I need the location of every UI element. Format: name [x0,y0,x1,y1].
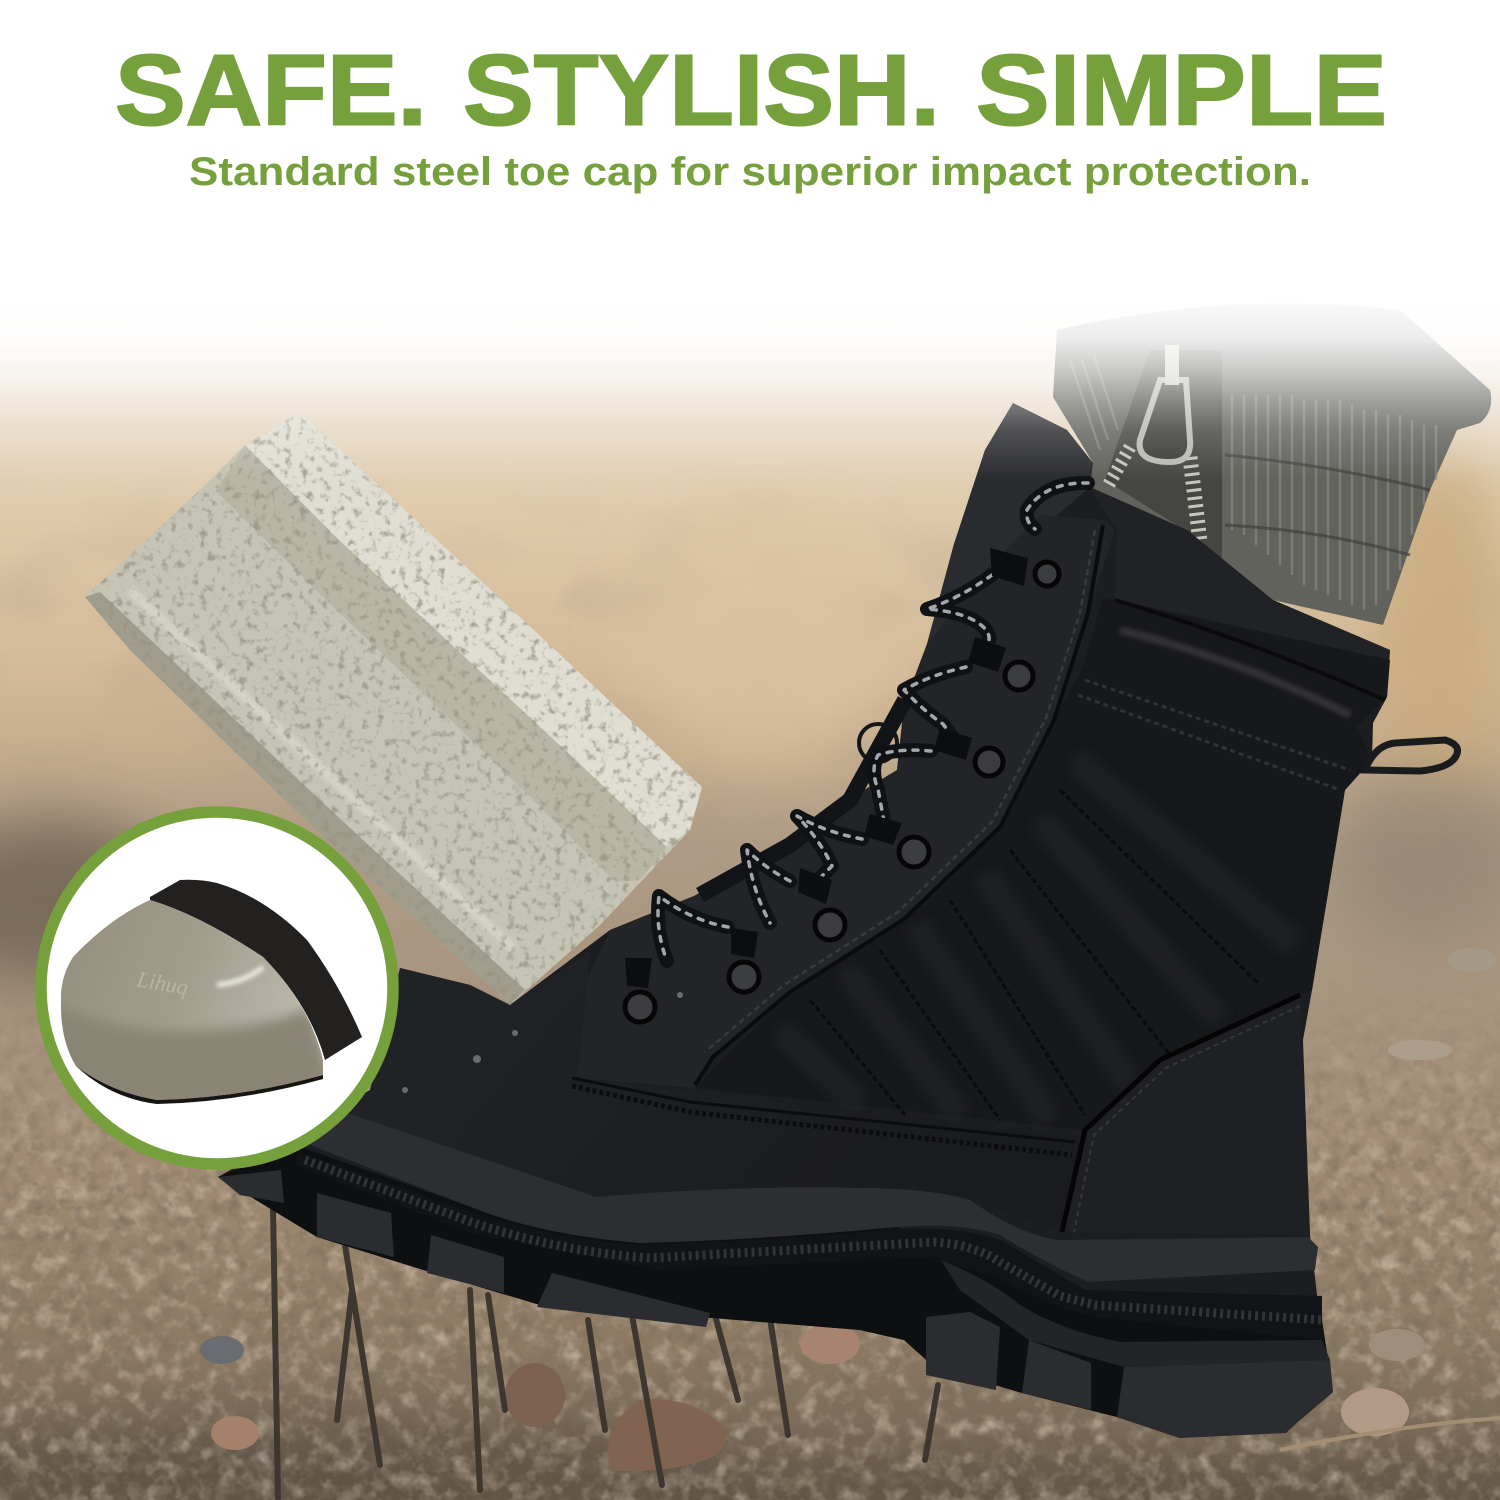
black rubber edge [150,880,362,1060]
brick pale groove [130,590,515,950]
outsole base [218,1145,1333,1438]
zipper puller [1140,380,1190,462]
pull loop [1365,740,1458,771]
nails under sole [273,1205,938,1498]
tongue [927,403,1093,644]
zipper teeth [1108,447,1130,486]
dust specks [402,992,683,1093]
mesh band [295,1152,1322,1340]
concrete brick [85,410,710,1010]
title: SIMPLE [976,34,1387,146]
title: SAFE. [115,34,427,146]
trouser ribbing [1070,355,1436,610]
tongue webbing [700,700,905,895]
quilted textile panel [695,667,1372,1130]
eyelets [625,562,1059,1022]
textile top stitching [1078,680,1350,790]
title [115,34,1387,146]
cap highlight [217,967,263,985]
ground stones [200,948,1500,1471]
midsole upper band [310,1113,1318,1282]
brick top face [245,412,702,847]
tongue ring [859,724,897,762]
boot [218,403,1458,1438]
quilting channels [780,760,1295,1120]
laces [658,483,1088,961]
white fade at top of photo [0,230,1500,480]
title: STYLISH. [463,34,940,146]
toe cap shell [60,900,323,1100]
collar padding: lower roll [1083,597,1390,727]
heel counter [1062,995,1310,1235]
toe cap front band [61,1006,323,1100]
inset: steel toe cap [41,812,393,1164]
tread lugs [218,1170,1333,1438]
cap embossed mark: Lihuq [134,966,190,1000]
boot upper silhouette [218,403,1390,1438]
collar padding: upper roll [1090,487,1390,690]
cap base outline [76,1066,323,1104]
brick silhouette [85,412,702,1005]
subtitle: Standard steel toe cap for superior impact protection. [189,150,1311,194]
heel rim [941,1260,1330,1367]
brick lower edge [85,592,525,1005]
toe box [300,950,1080,1232]
brick chamfer [216,445,667,882]
lace hooks [625,548,1028,988]
background: blurred field and gravel ground [0,355,1500,1500]
trouser leg with zipper [1053,303,1491,625]
eyestay leather strip [578,515,1115,1088]
